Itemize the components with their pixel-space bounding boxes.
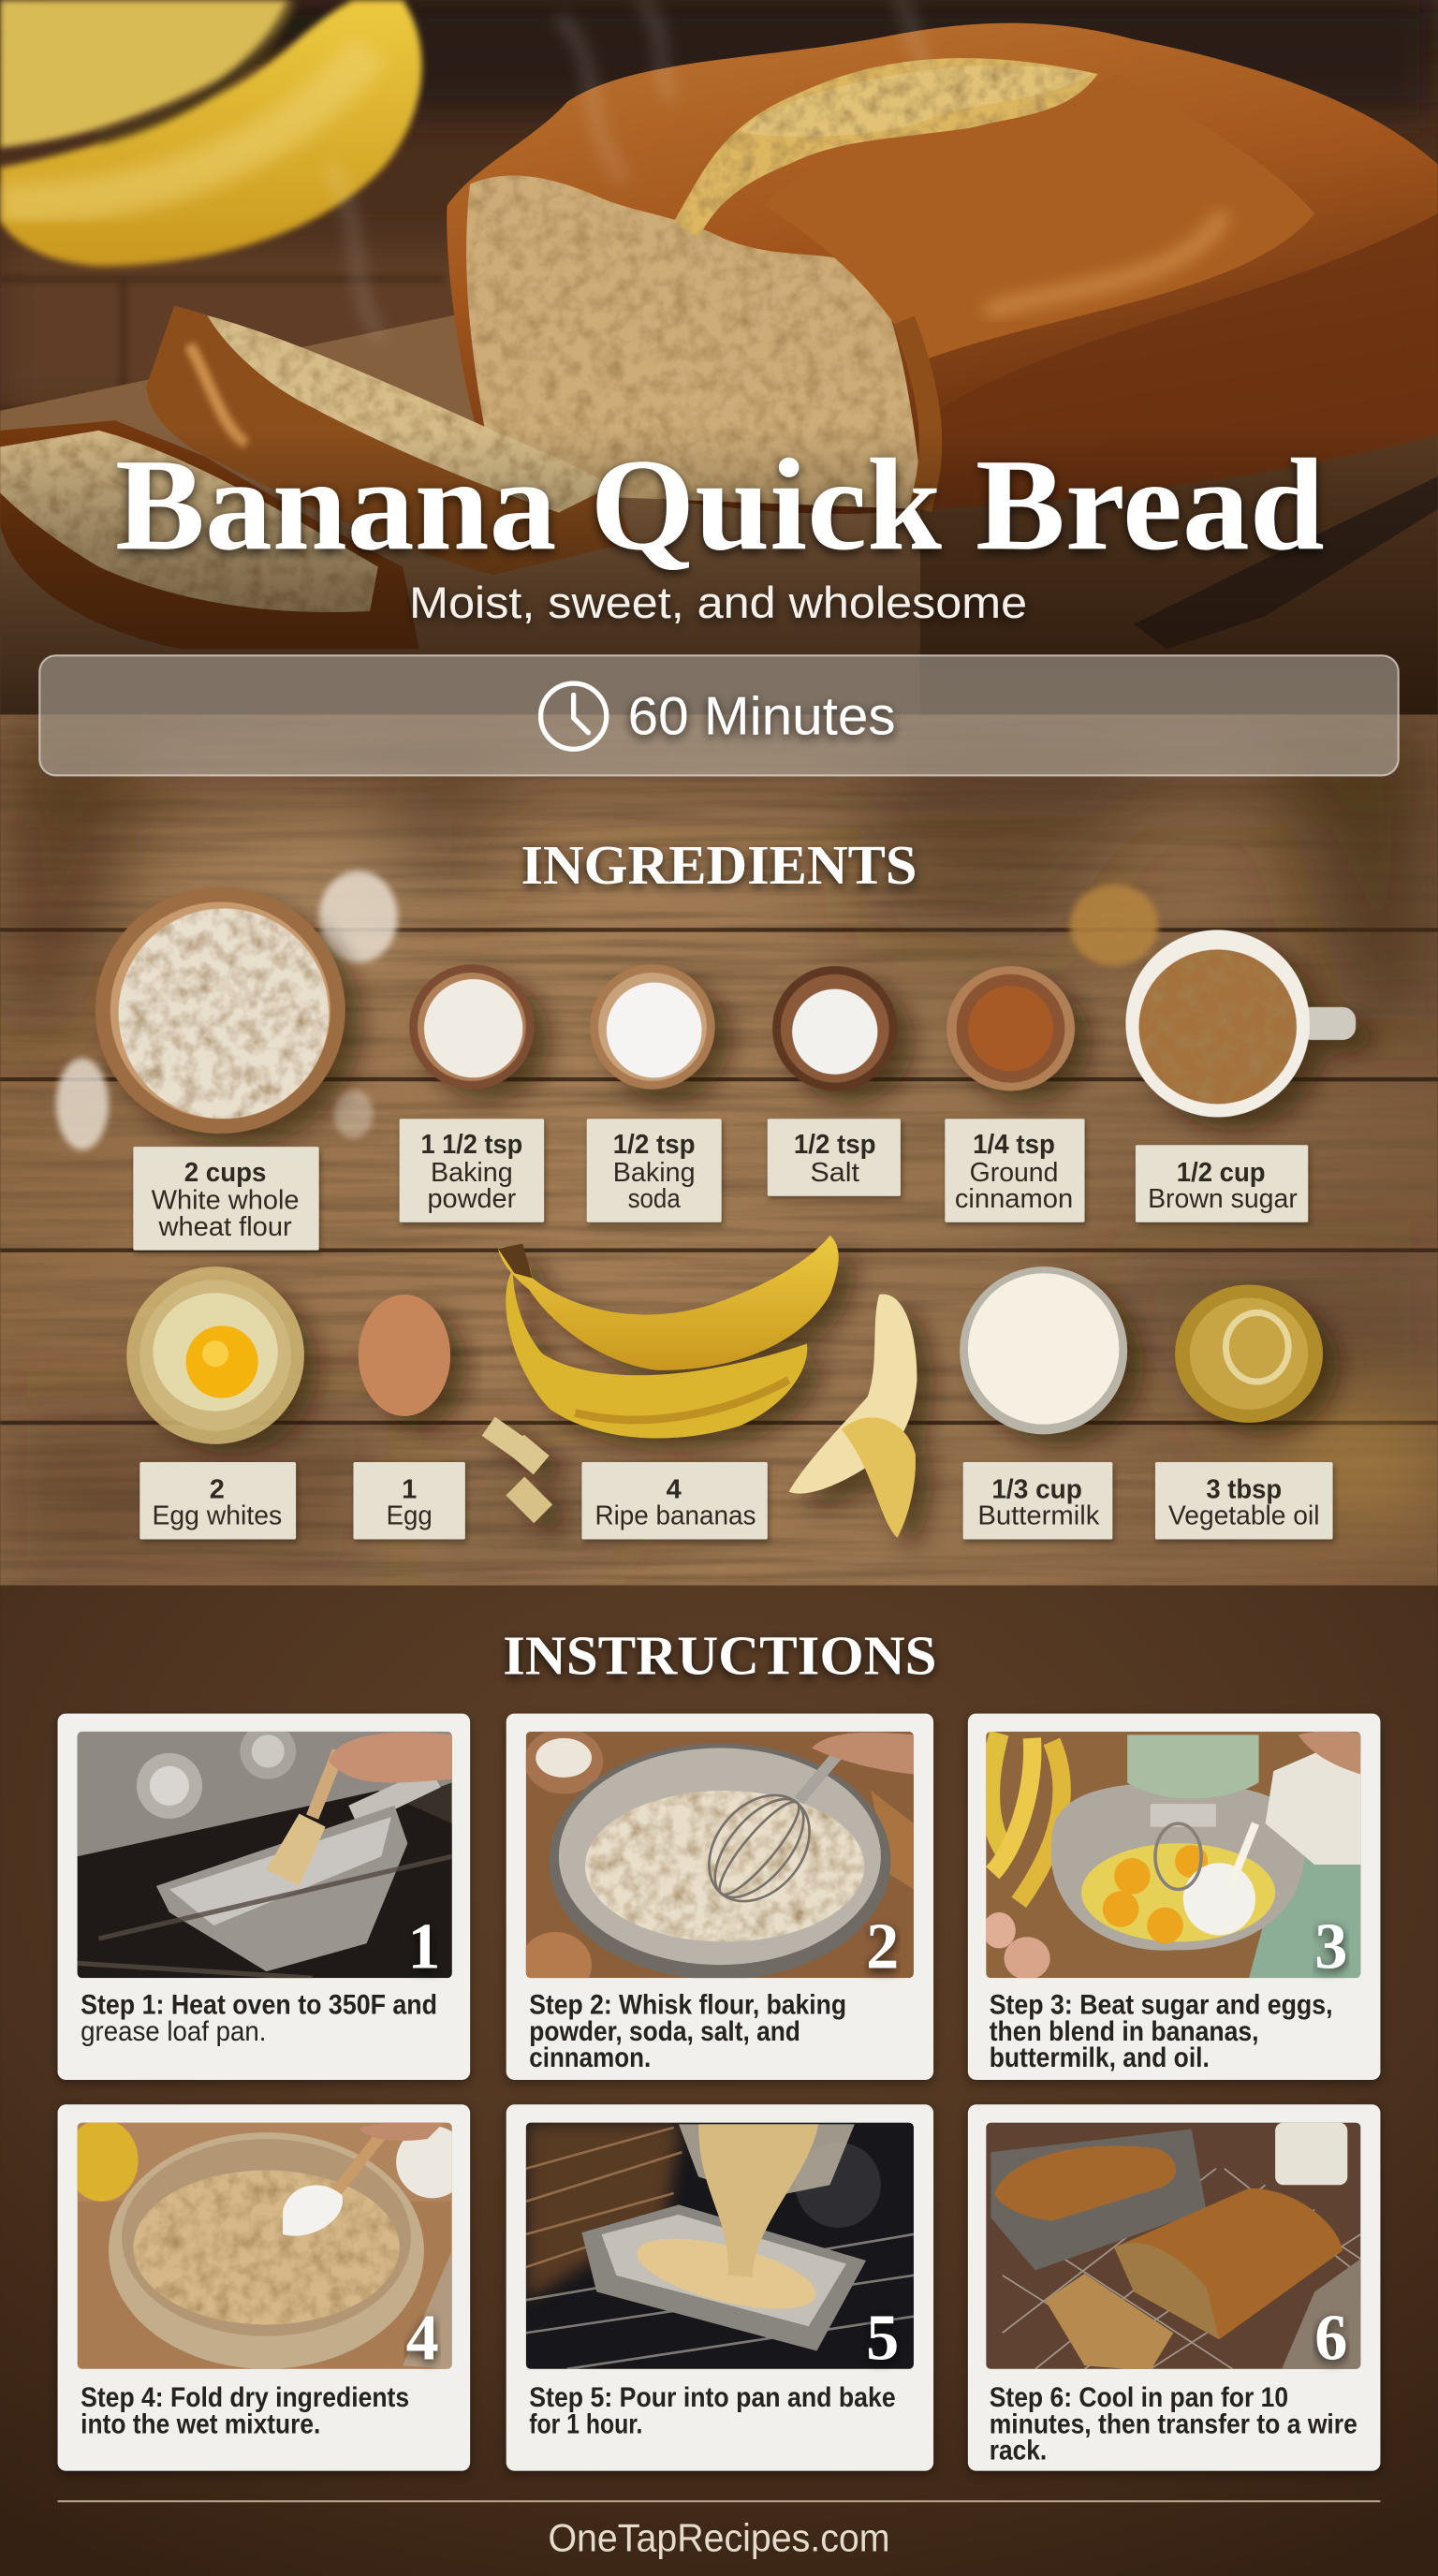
icon: steam wisps xyxy=(329,0,929,337)
label: flour: wheat flour xyxy=(158,1212,292,1242)
step 3 text: Step 3: Beat sugar and eggs, xyxy=(990,1990,1363,2021)
label: baking soda xyxy=(587,1119,722,1222)
label: cinnamon: Ground xyxy=(970,1158,1058,1188)
label: brown sugar xyxy=(1136,1145,1308,1222)
label: cinnamon: 1/4 tsp xyxy=(973,1130,1055,1160)
step 6 text: Step 6: Cool in pan for 10 xyxy=(990,2382,1315,2413)
icon: loaf of banana bread xyxy=(447,23,1438,514)
step 1 text: Step 1: Heat oven to 350F and xyxy=(81,1990,468,2021)
label: egg whites: 2 xyxy=(210,1475,225,1505)
image: folding batter xyxy=(66,2119,468,2369)
step 2 text: cinnamon. xyxy=(529,2042,651,2073)
label: egg: Egg xyxy=(387,1501,433,1531)
icon: flour dust xyxy=(56,871,398,1150)
step 1 text: grease loaf pan. xyxy=(81,2016,266,2047)
image: greasing a loaf pan xyxy=(78,1723,452,1978)
label: vegetable oil: Vegetable oil xyxy=(1168,1501,1319,1531)
step 6 text: minutes, then transfer to a wire xyxy=(990,2408,1357,2439)
panel: instructions xyxy=(0,1586,1438,2576)
label: buttermilk xyxy=(963,1462,1112,1540)
label: egg: 1 xyxy=(402,1475,417,1505)
step number 2: 2 xyxy=(866,1910,899,1983)
icon: bread slice, lower xyxy=(0,420,419,649)
step 3 text: buttermilk, and oil. xyxy=(990,2042,1210,2073)
label: baking soda: Baking xyxy=(613,1158,696,1188)
label: baking soda: 1/2 tsp xyxy=(613,1130,696,1160)
label: egg xyxy=(353,1462,465,1540)
label: egg whites: Egg whites xyxy=(152,1501,282,1531)
panel: ingredients wood background xyxy=(0,714,1438,1587)
image: cooling loaves on rack xyxy=(986,2123,1360,2371)
icon: cinnamon bowl xyxy=(946,966,1075,1090)
icon: clock xyxy=(541,683,607,749)
icon: ripe bananas xyxy=(498,1236,839,1438)
footer: website: OneTapRecipes.com xyxy=(548,2516,890,2560)
step 4 text: into the wet mixture. xyxy=(81,2408,320,2439)
icon: brown sugar cup xyxy=(1125,929,1356,1117)
subtitle: Moist, sweet, and wholesome xyxy=(409,578,1027,628)
step number 3: 3 xyxy=(1314,1910,1347,1983)
label: cinnamon: cinnamon xyxy=(955,1184,1073,1214)
panel: hero photo of banana bread xyxy=(0,0,1438,718)
icon: baking soda bowl xyxy=(590,964,715,1090)
step number 6: 6 xyxy=(1314,2301,1347,2374)
step 5 text: Step 5: Pour into pan and bake xyxy=(529,2382,929,2413)
card: step 5 xyxy=(506,2104,933,2471)
cutting board xyxy=(0,312,1438,718)
label: buttermilk: 1/3 cup xyxy=(991,1475,1082,1505)
label: ripe bananas: 4 xyxy=(667,1475,682,1505)
label: flour xyxy=(133,1147,319,1251)
label: salt: Salt xyxy=(810,1158,859,1188)
icon: whole egg xyxy=(359,1295,450,1416)
image: pouring batter in oven xyxy=(526,2123,914,2369)
heading: INGREDIENTS: INGREDIENTS xyxy=(521,834,917,896)
label: vegetable oil: 3 tbsp xyxy=(1206,1475,1282,1505)
icon: baking powder bowl xyxy=(409,964,535,1090)
label: buttermilk: Buttermilk xyxy=(977,1501,1100,1531)
icon: vegetable oil bowl xyxy=(1175,1284,1323,1423)
label: ripe bananas xyxy=(581,1462,768,1540)
icon: salt bowl xyxy=(772,966,897,1090)
step 5 text: for 1 hour. xyxy=(529,2408,642,2439)
step 4 text: Step 4: Fold dry ingredients xyxy=(81,2382,440,2413)
label: ripe bananas: Ripe bananas xyxy=(594,1501,756,1531)
label: baking powder: 1 1/2 tsp xyxy=(420,1130,522,1160)
label: salt xyxy=(768,1119,901,1196)
icon: blurred bananas top left xyxy=(0,0,422,266)
label: salt: 1/2 tsp xyxy=(794,1130,876,1160)
label: baking powder: Baking xyxy=(431,1158,513,1188)
card: step 1 xyxy=(58,1714,470,2080)
card: step 4 xyxy=(58,2104,470,2471)
step 3 text: then blend in bananas, xyxy=(990,2016,1259,2047)
image: beating eggs and sugar xyxy=(983,1731,1360,1980)
time text: 60 Minutes xyxy=(628,687,896,747)
label: egg whites xyxy=(139,1462,296,1540)
step number 1: 1 xyxy=(407,1910,441,1983)
label: flour: 2 cups xyxy=(184,1158,266,1188)
card: step 2 xyxy=(506,1714,933,2080)
image: whisking flour in a bowl xyxy=(520,1728,914,1998)
icon: flour bowl xyxy=(95,887,345,1134)
label: baking powder xyxy=(400,1119,544,1222)
icon: buttermilk glass xyxy=(960,1266,1127,1434)
step 2 text: Step 2: Whisk flour, baking xyxy=(529,1990,875,2021)
title: Banana Quick Bread xyxy=(115,432,1325,578)
label: baking powder: powder xyxy=(427,1184,517,1214)
heading: INSTRUCTIONS: INSTRUCTIONS xyxy=(503,1624,937,1686)
step number 4: 4 xyxy=(406,2301,439,2374)
icon: bread slice, upper xyxy=(146,305,633,575)
label: vegetable oil xyxy=(1155,1462,1333,1540)
label: brown sugar: 1/2 cup xyxy=(1177,1158,1266,1188)
label: flour: White whole xyxy=(152,1186,300,1216)
card: step 6 xyxy=(968,2104,1380,2471)
icon: egg whites bowl xyxy=(126,1266,304,1444)
card: step 3 xyxy=(968,1714,1380,2080)
step 2 text: powder, soda, salt, and xyxy=(529,2016,800,2047)
icon: cinnamon sugar spill xyxy=(1070,884,1158,966)
label: baking soda: soda xyxy=(628,1184,682,1214)
step 6 text: rack. xyxy=(990,2435,1047,2466)
label: cinnamon xyxy=(945,1119,1085,1222)
decorative plank joins and shadows xyxy=(0,929,1438,1423)
step number 5: 5 xyxy=(866,2301,899,2374)
icon: knife xyxy=(1134,476,1438,649)
panel: time bar xyxy=(39,655,1399,775)
icon: banana peel and pieces xyxy=(482,1295,917,1538)
label: brown sugar: Brown sugar xyxy=(1148,1184,1298,1214)
